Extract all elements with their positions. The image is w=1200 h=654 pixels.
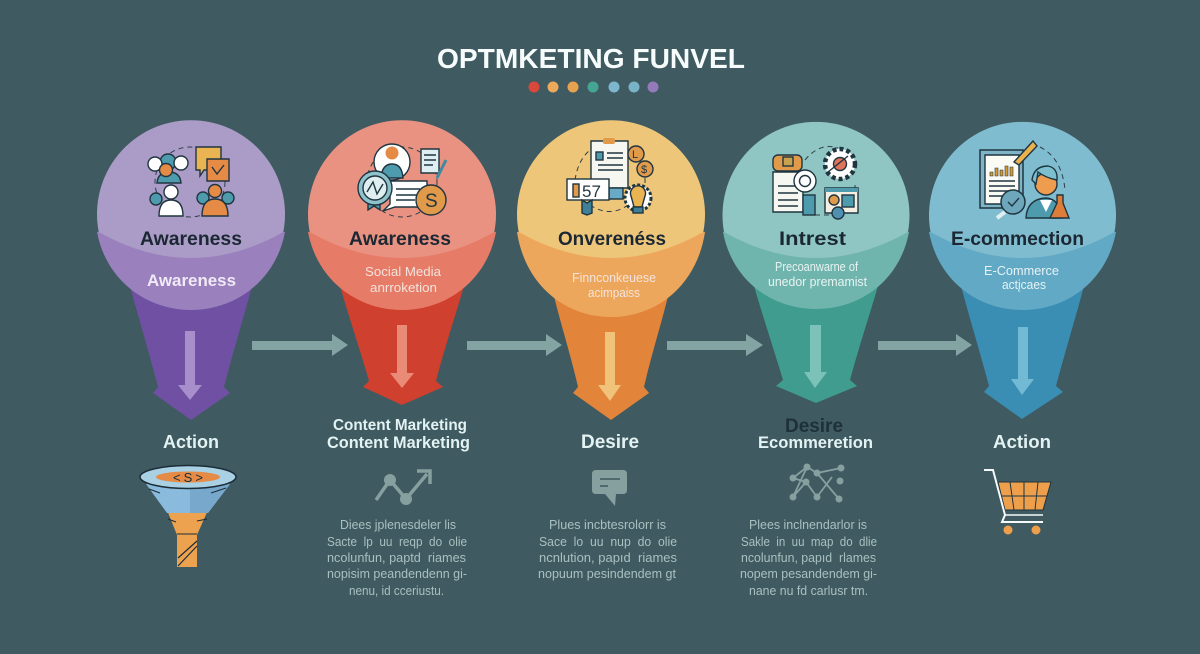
column 3 description: ncnlution, papıd riames (539, 550, 677, 565)
icon: trend line (376, 471, 430, 505)
icon: checklist, gear and screen (773, 146, 858, 219)
icon: document, coins and bulb: L (632, 149, 638, 161)
stage subheading: Finnconkeuese (572, 270, 656, 285)
panel: stage 3 orange funnel (517, 120, 705, 420)
icon: profile, badge and coin: S (425, 191, 438, 212)
column 2 description (327, 517, 467, 598)
funnel stem and arrowhead (961, 286, 1084, 419)
column 4 description: Sakle in uu map do dlie (741, 534, 877, 549)
column 3 description: nopuum pesindendem gt (538, 566, 676, 581)
column 2 description: Diees jplenesdeler lis (340, 517, 456, 532)
icon: document, coins and bulb (567, 138, 653, 215)
stage subheading: Precoanwarne of (775, 259, 858, 274)
stage heading: Awareness (140, 229, 242, 250)
inner down arrow (598, 332, 621, 401)
column 1 label: Action (163, 432, 219, 452)
funnel bowl lower band (929, 232, 1116, 310)
column 2 description: ncolunfun, paptd riames (327, 550, 466, 565)
funnel stem and arrowhead (553, 292, 669, 420)
inner down arrow (1011, 327, 1034, 395)
funnel bowl upper lens (517, 120, 705, 258)
column 2 description: nopisim peandendenn gi- (327, 566, 467, 581)
panel: stage 4 teal funnel (722, 122, 909, 403)
arrow: stage 2 to 3 (467, 334, 562, 356)
stage heading: Onverenéss (558, 229, 666, 250)
stage subheading second line: unedor premamist (768, 274, 867, 289)
arrow: stage 1 to 2 (252, 334, 348, 356)
icon: network chart (790, 464, 844, 502)
funnel bowl upper lens (722, 122, 909, 258)
column 4 description (740, 517, 877, 598)
panel: stage 2 red funnel (308, 120, 496, 405)
arrow: stage 3 to 4 (667, 334, 763, 356)
panel: stage 1 purple funnel (97, 120, 285, 420)
inner down arrow (804, 325, 827, 388)
column 2 description: Sacte lp uu reqp do olie (327, 534, 467, 549)
column 2 description: nenu, id cceriustu. (349, 583, 444, 598)
icon: document, coins and bulb: 57 (582, 182, 601, 201)
icon: people and chat (148, 147, 234, 217)
funnel bowl upper lens (929, 122, 1116, 258)
column 2 label line 2: Content Marketing (327, 434, 470, 452)
icon: funnel with coin: <S> (173, 470, 203, 485)
funnel bowl lower band (723, 232, 909, 309)
arrow: stage 4 to 5 (878, 334, 972, 356)
stage heading: E-commection (951, 229, 1084, 250)
column 3 description: Sace lo uu nup do olie (539, 534, 677, 549)
column 4 description: nane nu fd carlusr tm. (749, 583, 868, 598)
funnel bowl lower band (97, 232, 285, 310)
stage subheading: Awareness (147, 272, 236, 290)
column 5 label: Action (993, 432, 1051, 452)
icon: speech bubble (592, 470, 627, 506)
stage subheading: E-Commerce (984, 263, 1059, 278)
stage subheading second line: acimpaiss (588, 285, 640, 300)
column 3 label: Desire (581, 432, 639, 453)
column 4 description: nopem pesandendem gi- (740, 566, 877, 581)
icon: report, analyst and flask (980, 141, 1069, 218)
icon: document, coins and bulb: $ (641, 164, 647, 176)
stage heading: Intrest (779, 229, 847, 250)
title: OPTMKETING FUNVEL (437, 43, 745, 74)
funnel stem and arrowhead (130, 286, 252, 420)
column 3 description: Plues incbtesrolorr is (549, 517, 666, 532)
inner down arrow (178, 331, 202, 400)
column 4 label line 1: Desire (785, 416, 843, 437)
inner down arrow (390, 325, 414, 388)
stage subheading second line: anrroketion (370, 280, 437, 295)
title colour dots (528, 82, 658, 92)
panel: stage 5 blue funnel (929, 122, 1116, 419)
icon: shopping cart (984, 470, 1051, 534)
column 4 description: ncolunfun, papıd rlames (741, 550, 876, 565)
stage subheading second line: actįcaes (1002, 277, 1046, 292)
funnel bowl upper lens (97, 120, 285, 258)
funnel stem and arrowhead (754, 286, 878, 403)
funnel bowl lower band (308, 232, 496, 310)
stage heading: Awareness (349, 229, 451, 250)
funnel stem and arrowhead (340, 286, 464, 405)
funnel bowl upper lens (308, 120, 496, 258)
column 2 label line 1: Content Marketing (333, 417, 467, 434)
funnel bowl lower band (517, 232, 705, 317)
column 4 label line 2: Ecommeretion (758, 434, 873, 452)
column 4 description: Plees inclnendarlor is (749, 517, 867, 532)
icon: profile, badge and coin (358, 144, 446, 217)
column 3 description (538, 517, 677, 581)
icon: funnel with coin (140, 466, 236, 567)
stage subheading: Social Media (365, 264, 442, 279)
